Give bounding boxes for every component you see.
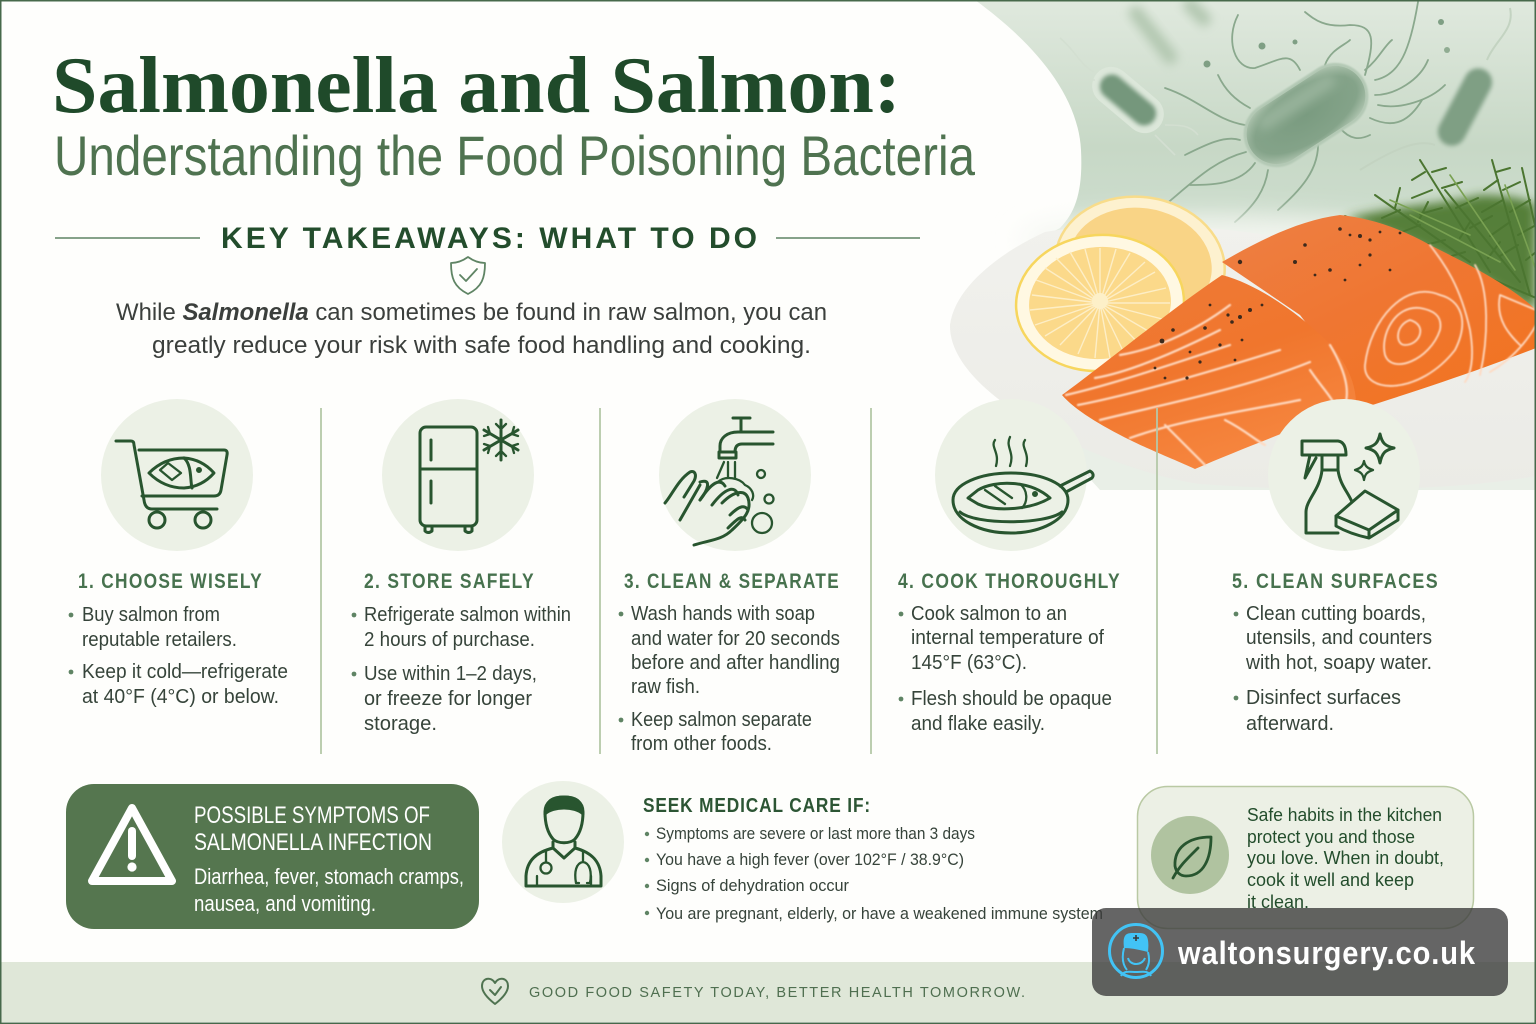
heading: 2. STORE SAFELY [364,570,535,593]
bullet list [619,603,840,755]
bullet list: raw fish. [631,676,700,698]
bullet list: Refrigerate salmon within [364,604,571,626]
bullet list: at 40°F (4°C) or below. [82,686,279,708]
icon: nurse logo [1110,924,1162,978]
bullet list: utensils, and counters [1246,627,1432,649]
icon: shield check [451,257,485,294]
heading: 1. CHOOSE WISELY [78,570,263,593]
callout text: you love. When in doubt, [1247,848,1444,868]
medical heading: SEEK MEDICAL CARE IF: [643,795,871,817]
icon: fridge and snowflake [382,399,534,551]
panel: choose wisely [69,399,288,708]
bullet list: and water for 20 seconds [631,628,840,650]
medical list: You have a high fever (over 102°F / 38.9°C) [656,850,964,869]
callout text: Safe habits in the kitchen [1247,805,1442,825]
symptoms text: Diarrhea, fever, stomach cramps, [194,864,464,889]
bullet list [899,603,1112,735]
symptoms text: nausea, and vomiting. [194,891,376,916]
bullet list: storage. [364,713,437,735]
right bacterium [1436,8,1512,148]
callout text: it clean. [1247,892,1309,912]
icon: heart check [482,979,508,1004]
bullet list [1234,603,1432,735]
bullet list: Keep it cold—refrigerate [82,661,288,683]
bullet list: Wash hands with soap [631,603,815,625]
bullet list: Use within 1–2 days, [364,663,537,685]
heading: 3. CLEAN & SEPARATE [624,570,840,593]
salmon fillet back [1222,215,1536,412]
footer slogan: GOOD FOOD SAFETY TODAY, BETTER HEALTH TOMORROW. [529,985,1025,1001]
watermark badge [1092,908,1508,996]
bullet list: Cook salmon to an [911,603,1067,625]
bullet list: reputable retailers. [82,629,237,651]
icon: spray bottle and sponge [1268,399,1420,551]
callout: safe habits [1138,786,1474,928]
panel: possible symptoms [66,784,479,929]
bullet list: and flake easily. [911,713,1045,735]
panel: cook thoroughly [898,399,1121,735]
bullet list: internal temperature of [911,627,1104,649]
bullet list [352,604,571,735]
icon: doctor [502,781,624,903]
callout text: cook it well and keep [1247,870,1414,890]
icon: tap and washing hands [659,399,811,551]
left bacterium [1092,71,1198,156]
bullet list: Flesh should be opaque [911,688,1112,710]
green hero background [950,0,1536,490]
medical list: Symptoms are severe or last more than 3 days [656,824,975,843]
bullet list [69,604,288,708]
bullet list: Keep salmon separate [631,709,812,731]
heading: 5. CLEAN SURFACES [1232,570,1439,593]
panel: seek medical care [502,781,1103,923]
introduction text [116,299,827,359]
title: Salmonella and Salmon: [52,42,901,130]
main bacterium [1165,2,1445,222]
hero image: bacteria and salmon [950,0,1536,490]
bullet list: Clean cutting boards, [1246,603,1426,625]
medical list: Signs of dehydration occur [656,876,849,895]
bullet list: with hot, soapy water. [1245,652,1432,674]
symptoms heading [194,802,432,856]
bullet list: before and after handling [631,652,840,674]
subtitle: Understanding the Food Poisoning Bacteria [54,124,976,187]
callout text [1247,805,1444,912]
bullet list: afterward. [1246,713,1334,735]
medical list [645,824,1103,923]
panel: clean and separate [619,399,840,755]
bullet list: 2 hours of purchase. [364,629,535,651]
icon: pan with fish [935,399,1093,551]
panel: store safely [352,399,571,735]
white glow above plate [1057,200,1338,236]
bullet list: from other foods. [631,733,772,755]
introduction text: greatly reduce your risk with safe food handling and cooking. [152,332,811,359]
plate [950,230,1064,400]
pepper seasoning [1154,227,1401,380]
symptoms heading: SALMONELLA INFECTION [194,829,432,856]
icon: warning triangle [92,808,172,881]
heading: 4. COOK THOROUGHLY [898,570,1121,593]
dill [1345,160,1536,312]
symptoms heading: POSSIBLE SYMPTOMS OF [194,802,430,829]
bullet list: Buy salmon from [82,604,220,626]
symptoms text [194,864,464,916]
icon: cart with fish [101,399,253,551]
bullet list: 145°F (63°C). [911,652,1027,674]
bullet list: Disinfect surfaces [1246,687,1401,709]
lemon slices [1014,195,1226,372]
callout text: protect you and those [1247,827,1415,847]
medical list: You are pregnant, elderly, or have a weakened immune system [656,904,1103,923]
introduction text: While Salmonella can sometimes be found in raw salmon, you can [116,299,827,326]
watermark text: waltonsurgery.co.uk [1177,935,1476,971]
section heading: key takeaways: KEY TAKEAWAYS: WHAT TO DO [221,222,760,255]
footer band [2,962,1534,1022]
bullet list: or freeze for longer [364,688,532,710]
icon: leaf [1151,816,1229,894]
blurred background bacteria [1126,0,1214,67]
salmon fillet front [1062,275,1356,469]
panel: clean surfaces [1232,399,1439,735]
